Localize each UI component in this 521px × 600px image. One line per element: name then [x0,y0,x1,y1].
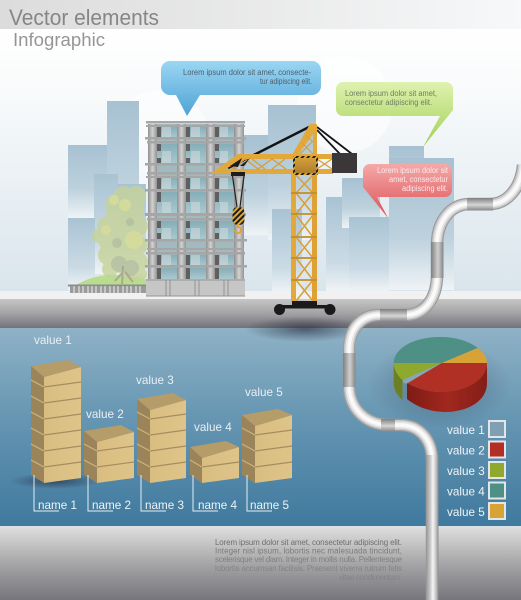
title: Vector elements [9,5,159,30]
pie slice: blue [402,363,442,384]
footer divider [0,526,521,528]
ground band [0,299,521,328]
legend: value 5 [447,506,485,519]
legend [447,421,505,519]
crane cabin [294,157,317,174]
legend swatches [489,421,505,519]
crane tower top [292,124,317,155]
footer text: lobortis accumsan facilisis. Praesent viverra rutrum felis [215,564,402,573]
legend: value 2 [447,444,485,458]
speech bubble: red: Lorem ipsum dolor sit [377,166,449,175]
subtitle: Infographic [13,30,105,50]
footer text: Lorem ipsum dolor sit amet, consectetur adipiscing elit. [215,538,402,547]
tree and hill [76,186,148,286]
bar 2 [84,425,134,483]
bar value labels: value 4 [194,421,232,434]
panel: blue chart area [0,328,521,527]
speech bubble: green: consectetur adipiscing elit. [345,98,432,107]
shadows on blue panel [10,316,512,489]
speech bubble: blue: Lorem ipsum dolor sit amet, consecte- [183,68,311,77]
background sky [0,29,521,291]
bar name labels: name 2 [92,499,131,512]
bar value labels: value 2 [86,408,124,421]
speech bubble: green [336,82,453,147]
bar name labels [34,475,289,512]
pie side: red [407,363,487,412]
bar name labels: name 3 [145,499,184,512]
crane mast [291,174,317,302]
building windows [157,127,234,279]
pie slice: red [407,363,487,392]
header band [0,0,521,29]
counterweight [332,153,357,173]
crane hook [231,172,245,233]
speech bubble: blue: tur adipiscing elit. [260,77,312,86]
bar name labels: name 4 [198,499,237,512]
bar 5 [242,409,292,483]
bar value labels [34,334,283,434]
bar value labels: value 5 [245,386,283,399]
speech bubble: red: adipiscing elit. [402,184,448,193]
ground strip [0,291,521,299]
bar value labels: value 1 [34,334,72,347]
speech bubble: red [363,164,452,218]
crane cables [228,127,352,168]
pie side: olive [394,363,402,400]
footer text: vitae condimentum. [339,573,402,582]
fence [68,284,147,293]
legend: value 3 [447,465,485,478]
pipe couplings [343,198,493,600]
footer text: scelerisque vel diam. Integer in mollis nulla. Pellentesque [215,555,403,564]
bar name labels: name 5 [250,499,289,512]
crane base [274,301,336,315]
bar 4 [190,441,239,483]
pie slice: green [394,363,442,380]
crane [210,124,357,315]
crane jib [210,154,333,174]
city skyline [68,57,454,294]
legend: value 4 [447,486,485,498]
bar chart [31,360,292,483]
building base [146,279,245,296]
speech bubble: red: amet, consectetur [389,175,448,184]
pie slice: teal [394,337,478,363]
building [145,121,247,296]
footer text [215,538,403,582]
bar 3 [137,393,186,483]
bar name labels: name 1 [38,499,77,512]
speech bubble: green: Lorem ipsum dolor sit amet, [345,89,437,98]
footer text: Integer nisl ipsum, lobortis nec malesuada tincidunt, [215,546,402,556]
legend: value 1 [447,424,485,437]
speech bubble: blue [161,61,321,116]
bar 1 [31,360,81,483]
bar value labels: value 3 [136,374,174,387]
pie slice: orange [442,348,487,363]
pipe [343,165,521,600]
footer band [0,527,521,600]
pie chart [394,337,487,412]
